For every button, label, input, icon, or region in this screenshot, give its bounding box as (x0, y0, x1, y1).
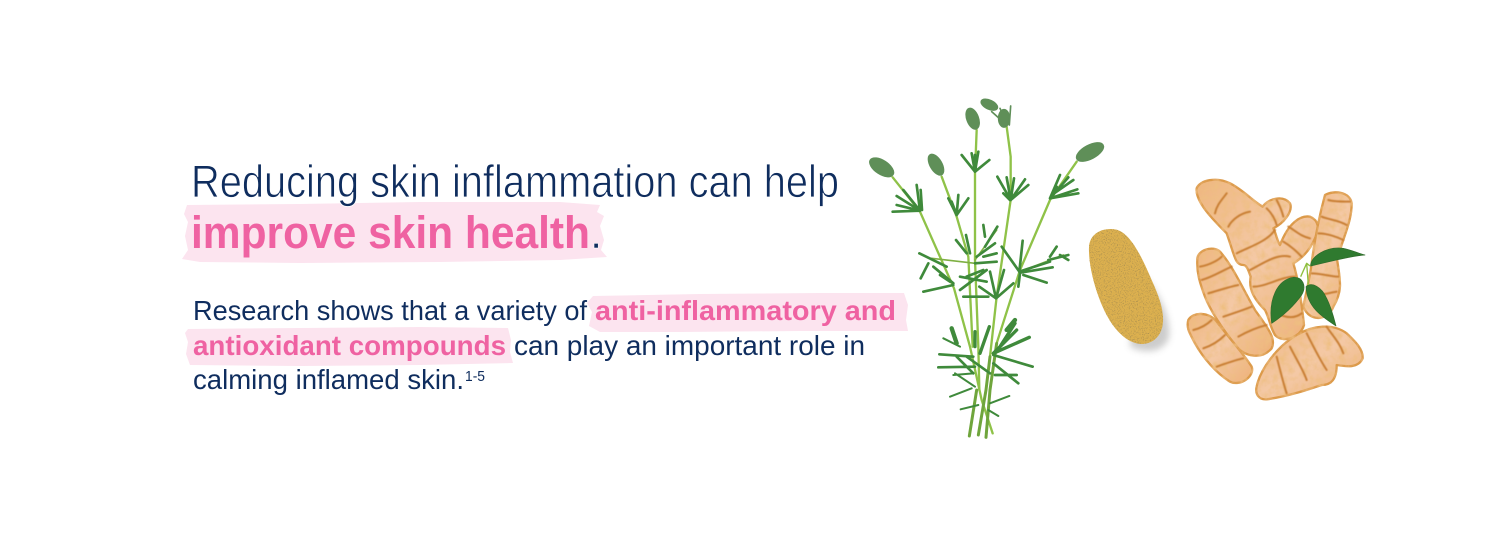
tablet body (1089, 229, 1163, 344)
turmeric root: middle long (1197, 249, 1273, 356)
turmeric leaves (1271, 248, 1365, 326)
herb stems (893, 127, 1077, 437)
body line 2 highlighted: antioxidant compounds (193, 330, 506, 361)
highlight: body second line brush stroke (185, 327, 513, 366)
herb flower heads (867, 97, 1106, 180)
body line 1 regular: Research shows that a variety of (193, 295, 587, 326)
body line 1 highlighted: anti-inflammatory and (595, 295, 896, 326)
illustration: supplement tablet (1089, 229, 1169, 351)
herb leaf whorls (893, 152, 1078, 416)
turmeric root: top branching (1197, 180, 1318, 339)
reference superscript: 1-5 (465, 368, 485, 385)
turmeric root: bottom right (1256, 327, 1363, 399)
body line 2 regular: can play an important role in (514, 330, 865, 361)
title line 2 highlighted: improve skin health (191, 207, 590, 258)
tablet shadow (1130, 270, 1169, 351)
body text block (193, 295, 896, 395)
title (191, 156, 839, 258)
highlight: body first line brush stroke (587, 293, 908, 332)
highlight: heading brush stroke (182, 202, 607, 263)
title period: . (590, 209, 602, 258)
illustration: green herb sprigs (867, 97, 1106, 437)
turmeric root: lower left (1188, 314, 1252, 383)
illustration: turmeric roots and leaves (1188, 180, 1365, 399)
title line 1: Reducing skin inflammation can help (191, 156, 839, 207)
turmeric root ridges (1193, 193, 1350, 393)
body line 3 regular: calming inflamed skin. (193, 364, 464, 395)
turmeric root: right (1303, 192, 1352, 318)
